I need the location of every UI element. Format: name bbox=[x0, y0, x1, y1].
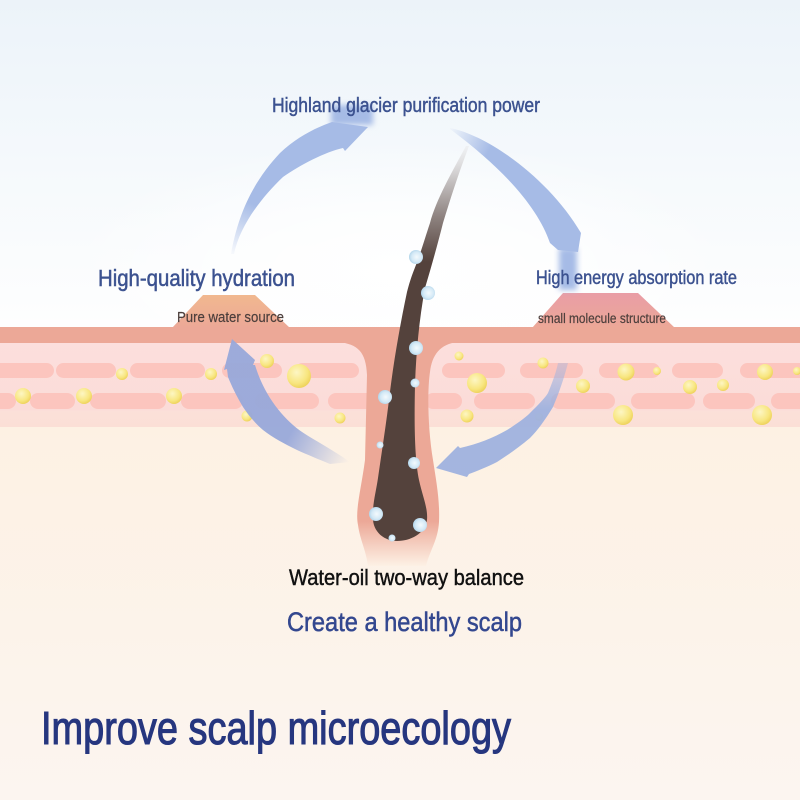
skin layers bbox=[0, 327, 800, 427]
hair follicle bbox=[338, 342, 458, 566]
heading: hydration: High-quality hydration bbox=[98, 265, 295, 291]
arrow: absorption to follicle bbox=[436, 363, 568, 477]
arrow: hydration to glacier bbox=[231, 105, 373, 254]
arrow: glacier to absorption bbox=[450, 128, 581, 290]
left skin mound bbox=[172, 295, 290, 328]
heading: glacier: Highland glacier purification power bbox=[272, 95, 540, 117]
hair shaft and bulb bbox=[373, 146, 469, 541]
label: balance: Water-oil two-way balance bbox=[289, 565, 524, 590]
heading: absorption: High energy absorption rate bbox=[536, 268, 737, 289]
yellow nutrient droplets bbox=[15, 352, 800, 425]
label: molecule structure: small molecule structure bbox=[538, 311, 666, 326]
arrow: follicle to hydration bbox=[224, 339, 350, 464]
subheading: healthy scalp: Create a healthy scalp bbox=[287, 607, 522, 637]
label: water source: Pure water source bbox=[177, 310, 284, 326]
main title: Improve scalp microecology bbox=[41, 702, 511, 754]
skin cell bars bbox=[0, 363, 800, 409]
right skin mound bbox=[532, 293, 675, 328]
water bubbles bbox=[369, 250, 435, 542]
